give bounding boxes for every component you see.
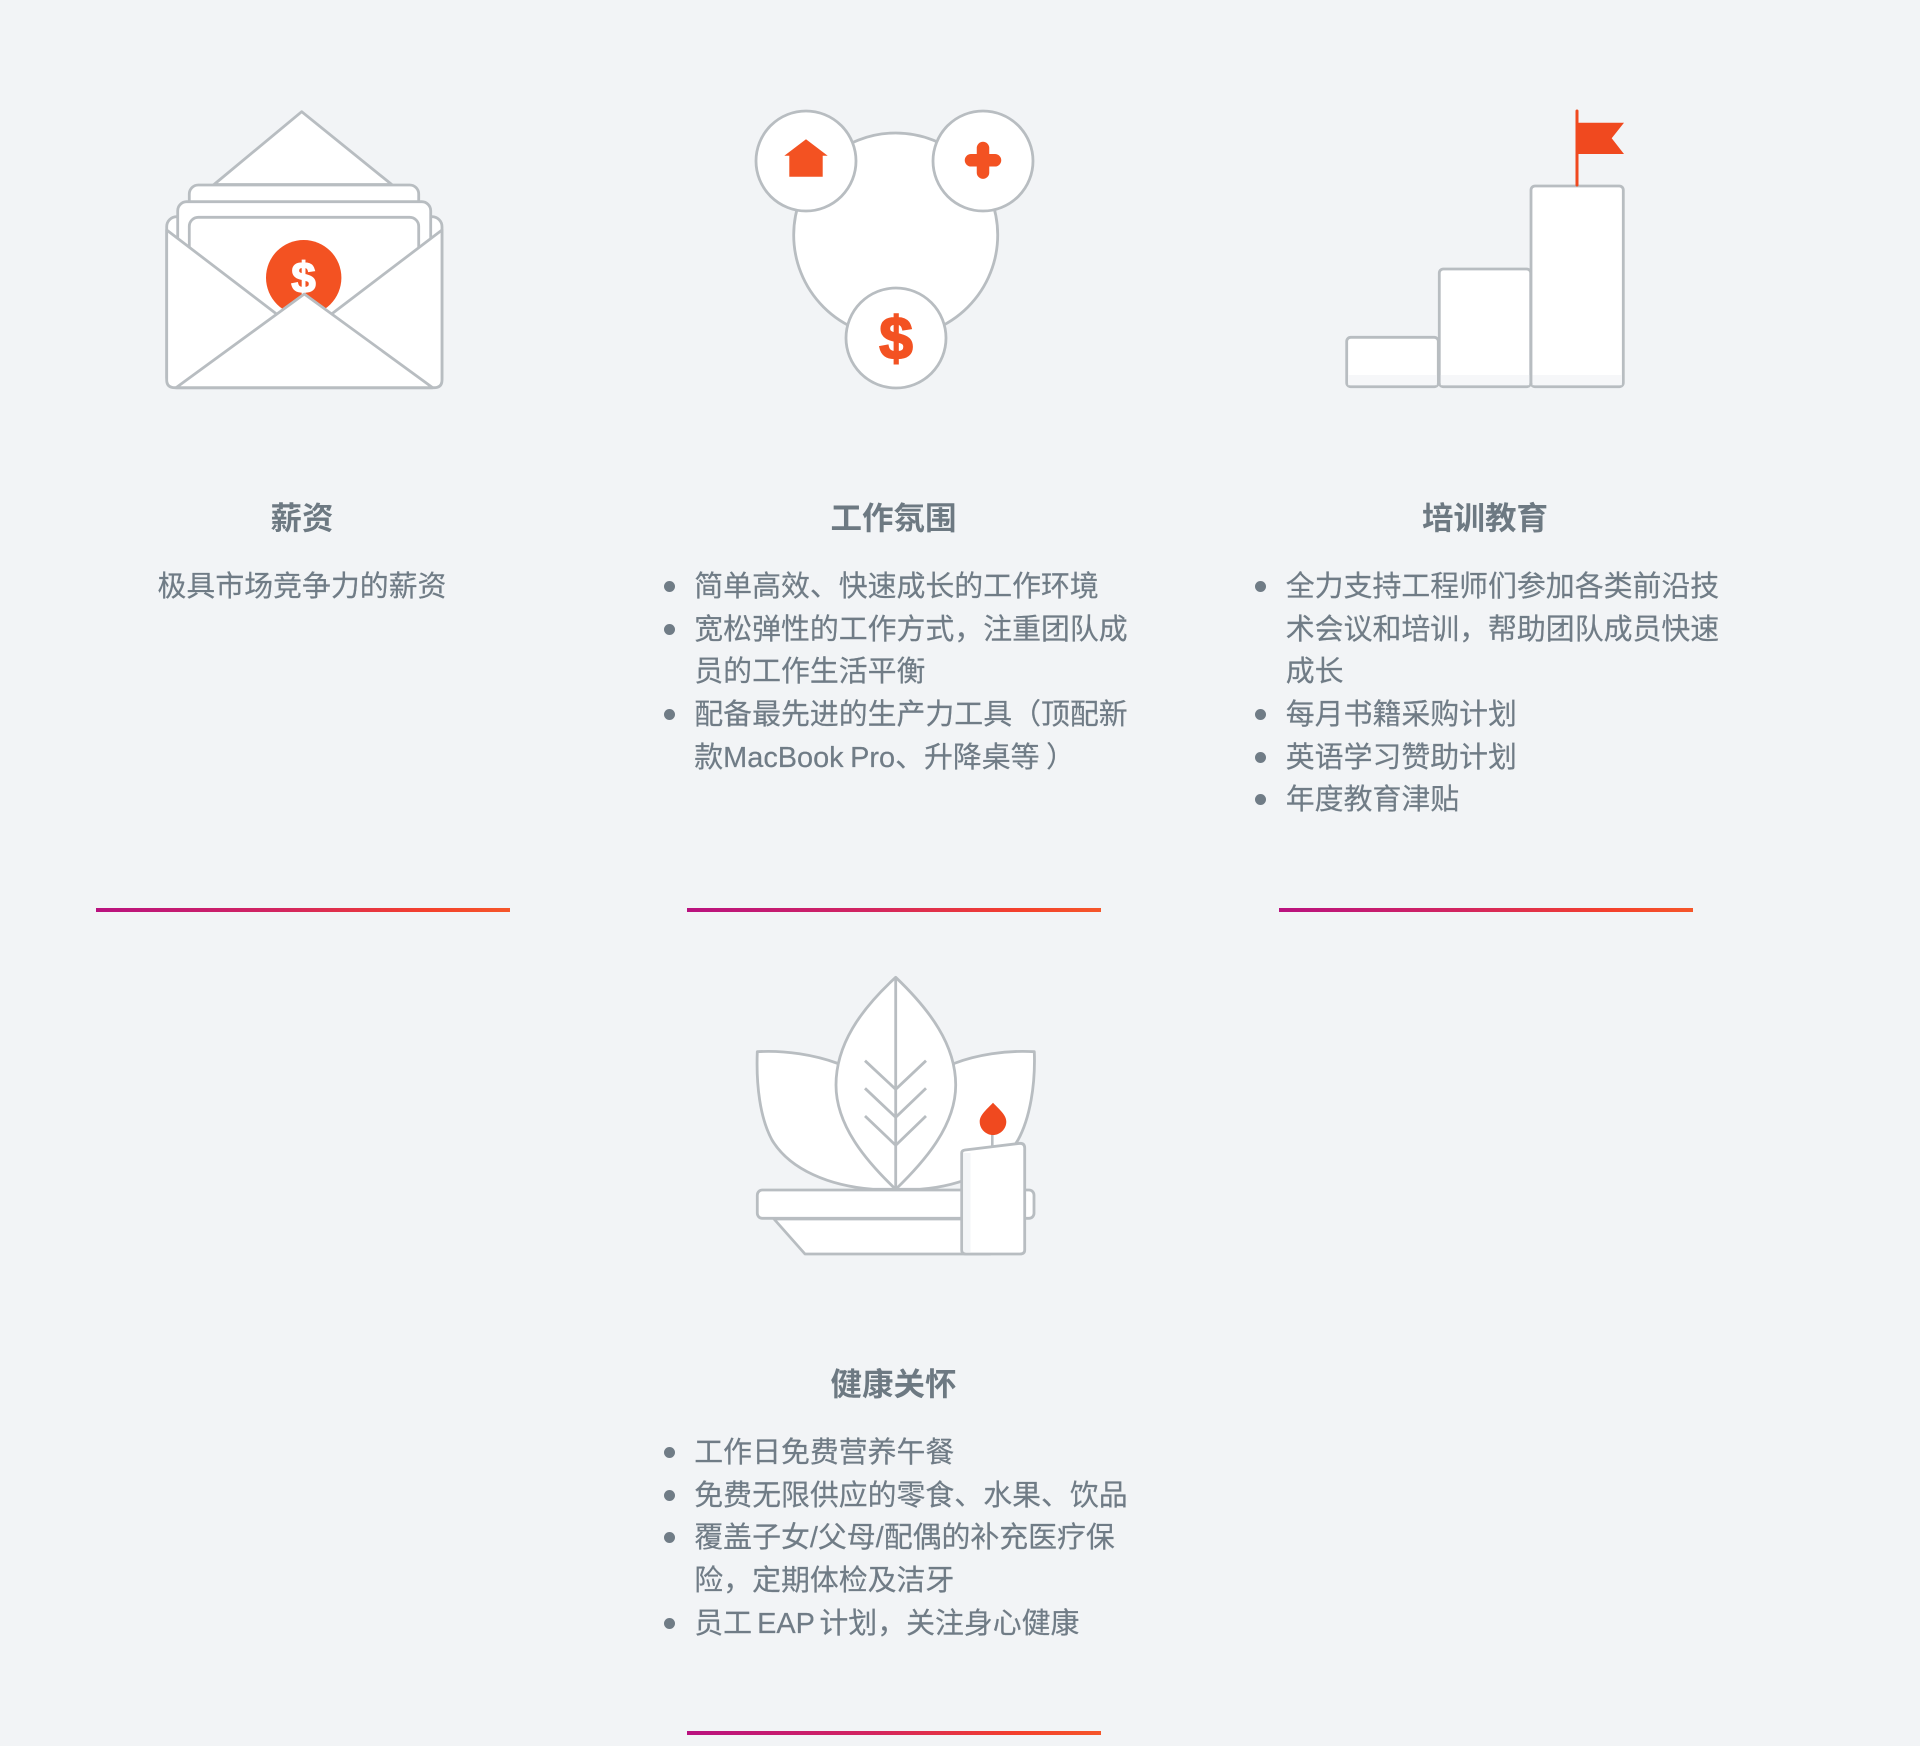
heading: work atmosphere: 工作氛围 — [830, 500, 956, 536]
list: health care: 险，定期体检及洁牙 — [694, 1565, 954, 1597]
divider: work atmosphere — [687, 908, 1101, 912]
list: work atmosphere: 配备最先进的生产力工具（顶配新 — [694, 699, 1128, 731]
list: training and education: 每月书籍采购计划 — [1286, 699, 1517, 731]
icon: leaves and candle — [756, 976, 1036, 1256]
text: salary description: 极具市场竞争力的薪资 — [158, 571, 446, 603]
list: work atmosphere — [664, 571, 1128, 774]
heading: health care: 健康关怀 — [830, 1366, 956, 1402]
panel: health care — [664, 976, 1128, 1735]
divider: training and education — [1279, 908, 1693, 912]
list: health care: 免费无限供应的零食、水果、饮品 — [694, 1480, 1128, 1512]
icon: envelope with dollar — [165, 110, 444, 390]
list: training and education — [1255, 571, 1719, 816]
list: work atmosphere: 宽松弹性的工作方式，注重团队成 — [694, 614, 1128, 646]
list: work atmosphere: 简单高效、快速成长的工作环境 — [694, 571, 1099, 603]
list: training and education: 年度教育津贴 — [1286, 784, 1459, 816]
panel: training and education — [1255, 110, 1719, 912]
list: training and education: 英语学习赞助计划 — [1286, 742, 1517, 774]
list: health care — [664, 1437, 1128, 1640]
heading: salary: 薪资 — [270, 500, 334, 536]
panel: work atmosphere — [664, 110, 1128, 912]
list: training and education: 术会议和培训，帮助团队成员快速 — [1286, 614, 1719, 646]
list: health care: 员工 EAP 计划，关注身心健康 — [694, 1608, 1079, 1640]
heading: training and education: 培训教育 — [1422, 500, 1548, 536]
icon: stairs with flag — [1345, 110, 1625, 388]
list: health care: 覆盖子女/父母/配偶的补充医疗保 — [694, 1522, 1115, 1554]
icon: envelope with dollar: $ — [291, 254, 316, 303]
divider: health care — [687, 1731, 1101, 1735]
divider: salary — [96, 908, 510, 912]
icon: three circles: $ — [879, 305, 913, 372]
panel: salary — [96, 110, 510, 912]
list: training and education: 全力支持工程师们参加各类前沿技 — [1286, 571, 1719, 603]
list: work atmosphere: 款MacBook Pro、升降桌等 ） — [694, 742, 1075, 774]
list: work atmosphere: 员的工作生活平衡 — [694, 656, 925, 688]
list: training and education: 成长 — [1286, 656, 1344, 688]
list: health care: 工作日免费营养午餐 — [694, 1437, 954, 1469]
icon: three circles — [754, 110, 1034, 390]
